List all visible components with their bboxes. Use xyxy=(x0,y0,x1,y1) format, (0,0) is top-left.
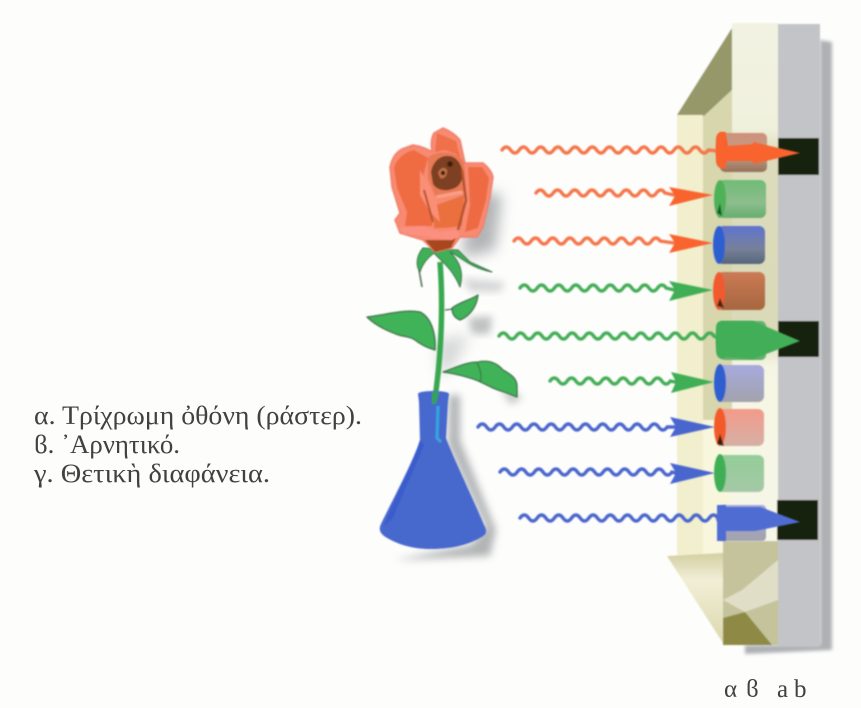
olive top face xyxy=(677,28,732,117)
optical plate assembly xyxy=(667,23,832,654)
legend text: α. Τρίχρωμη ὀθόνη (ράστερ). xyxy=(34,401,362,430)
orange arrow 2 xyxy=(536,187,713,206)
plate labels xyxy=(724,676,806,703)
cylinder 8 green xyxy=(714,454,764,492)
light transparency plate xyxy=(732,23,778,543)
plate labels: a xyxy=(777,676,788,703)
grey negative plate xyxy=(778,24,820,646)
cylinder 7 red xyxy=(714,408,764,446)
green long arrow 5 xyxy=(499,321,800,359)
stem xyxy=(435,262,442,398)
plate labels: α xyxy=(724,676,737,703)
left leaf xyxy=(367,311,435,350)
left prism faces xyxy=(677,115,703,555)
sepals xyxy=(417,248,492,287)
flask xyxy=(380,391,486,549)
legend text: ϐ. ᾿Αρνητικό. xyxy=(34,430,180,459)
drop shadow of plates xyxy=(745,40,832,654)
rose and flask shadow xyxy=(395,190,523,560)
blue arrow 8 xyxy=(500,463,715,484)
orange arrow 3 xyxy=(514,234,713,253)
cylinder 9 blue xyxy=(720,505,766,541)
black squares xyxy=(778,138,819,175)
legend text xyxy=(33,401,362,488)
wavy arrows xyxy=(478,132,800,541)
legend text: γ. Θετικὴ διαφάνεια. xyxy=(33,459,270,488)
green arrow 6 xyxy=(550,372,714,393)
cylinder 1 red xyxy=(716,132,767,172)
cylinder 4 orange xyxy=(713,272,765,310)
small leaf xyxy=(445,295,478,320)
plate labels: ϐ xyxy=(746,676,759,703)
cylinder 6 blue xyxy=(714,364,764,402)
cylinder 3 blue xyxy=(713,226,765,264)
filter cylinders xyxy=(713,132,767,541)
rose stem and leaves xyxy=(367,248,517,398)
orange long arrow 1 xyxy=(502,132,800,168)
bottom prism faces xyxy=(667,553,723,643)
cylinder 5 green xyxy=(716,321,766,360)
cylinder 2 green xyxy=(714,180,766,218)
right lower leaf xyxy=(443,361,517,397)
blue long arrow 9 xyxy=(520,505,800,541)
rose flower xyxy=(390,128,493,252)
plate labels: b xyxy=(794,676,806,703)
green arrow 4 xyxy=(520,281,713,301)
blue arrow 7 xyxy=(478,417,715,437)
